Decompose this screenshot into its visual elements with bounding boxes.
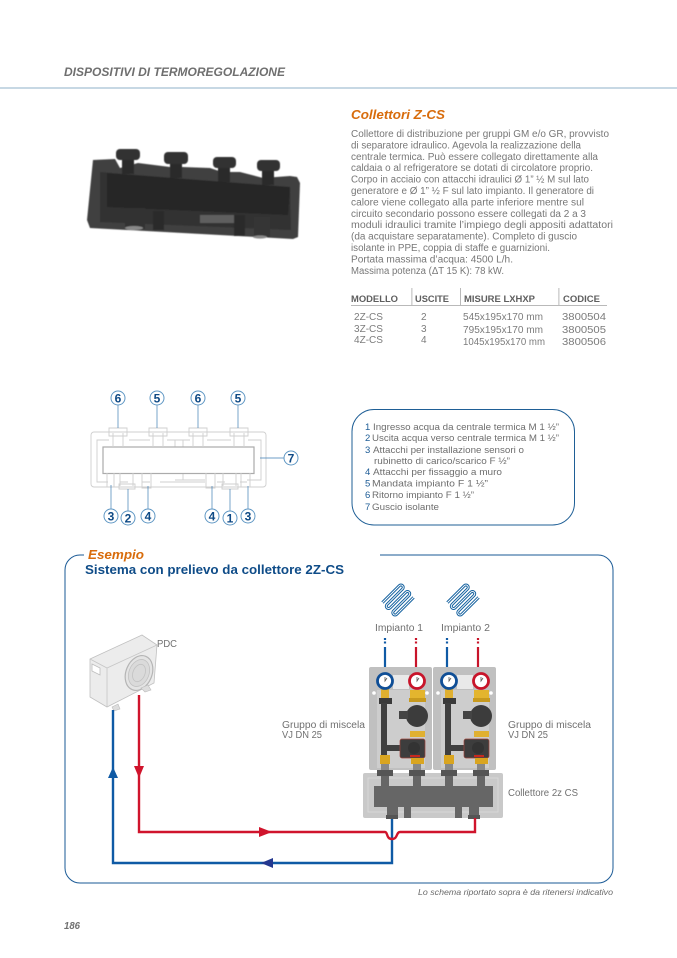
product table <box>351 288 607 348</box>
legend panel: Guscio isolante <box>372 502 439 513</box>
product description: moduli idraulici tramite l’impiego degli appositi adattatori <box>351 220 613 231</box>
heading: system: Sistema con prelievo da collettore 2Z-CS <box>85 562 344 577</box>
arrow: red right <box>259 827 272 837</box>
legend panel <box>352 410 574 525</box>
legend panel: 3 <box>365 445 370 456</box>
callout 6 <box>111 391 125 405</box>
legend panel: 5 <box>365 478 370 490</box>
product table: MISURE LXHXP <box>464 294 536 305</box>
label: mixing group left <box>282 720 365 741</box>
product table: MODELLO <box>351 294 398 305</box>
callout 4 <box>141 509 155 523</box>
product table: 4 <box>421 335 427 346</box>
page number: 186 <box>64 920 80 932</box>
footnote: Lo schema riportato sopra è da ritenersi indicativo <box>418 887 613 897</box>
icon: underfloor coil 1 <box>382 584 414 616</box>
product table: 3800506 <box>562 337 606 348</box>
callout 5 <box>231 391 245 405</box>
example panel frame <box>65 555 613 883</box>
callout 1 <box>223 511 237 525</box>
collector 2z CS <box>363 770 503 819</box>
mixing group 2 <box>433 667 496 770</box>
label: mixing group left: VJ DN 25 <box>282 730 322 741</box>
legend panel: Ritorno impianto F 1 ½” <box>372 490 474 501</box>
legend panel: 7 <box>365 502 370 513</box>
callout 4: 4 <box>209 509 216 523</box>
callout 1: 1 <box>227 511 234 525</box>
callout 5: 5 <box>154 391 161 405</box>
page section title: DISPOSITIVI DI TERMOREGOLAZIONE <box>64 67 285 79</box>
legend panel: Ingresso acqua da centrale termica M 1 ½” <box>373 422 559 433</box>
heading: Esempio: Esempio <box>88 547 144 562</box>
callout 4 <box>205 509 219 523</box>
label: mixing group right: Gruppo di miscela <box>508 720 591 731</box>
legend panel: 6 <box>365 490 370 501</box>
label: Impianto 1: Impianto 1 <box>375 623 423 634</box>
product description: Collettore di distribuzione per gruppi GM e/o GR, provvisto <box>351 129 609 140</box>
product description: generatore e Ø 1” ½ F sul lato impianto. Il generatore di <box>351 186 594 197</box>
callout 3 <box>241 509 255 523</box>
product description: centrale termica. Può essere collegato direttamente alla <box>351 152 598 163</box>
product description: Corpo in acciaio con attacchi idraulici Ø 1” ½ M sul lato <box>351 175 589 186</box>
product table: 3Z-CS <box>354 324 383 335</box>
legend panel: Uscita acqua verso centrale termica M 1 ½” <box>372 433 559 444</box>
product table: 3800504 <box>562 312 606 323</box>
plant supply and return stubs <box>385 638 478 667</box>
callout 5: 5 <box>235 391 242 405</box>
label: mixing group left: Gruppo di miscela <box>282 720 365 731</box>
product table: USCITE <box>415 294 449 305</box>
product table: 1045x195x170 mm <box>463 337 545 348</box>
label: PDC: PDC <box>157 639 177 650</box>
product description: di separatore idraulico. Agevola la realizzazione della <box>351 140 581 151</box>
product photo: collector <box>87 149 300 239</box>
blue return pipe <box>113 710 392 863</box>
legend panel: Attacchi per fissaggio a muro <box>373 467 502 478</box>
red supply pipe <box>139 695 475 839</box>
legend panel: Attacchi per installazione sensori o <box>373 445 524 456</box>
product table: 3800505 <box>562 325 606 336</box>
label: mixing group right: VJ DN 25 <box>508 730 548 741</box>
product table: 545x195x170 mm <box>463 312 543 323</box>
arrow: red down <box>134 766 144 778</box>
product description: calore viene collegato alla parte inferiore mentre sul <box>351 197 584 208</box>
product table: 2 <box>421 312 427 323</box>
product description: circuito secondario possono essere collegati da 2 a 3 <box>351 209 586 220</box>
callout 6: 6 <box>115 391 122 405</box>
arrow: blue up <box>108 767 118 778</box>
legend panel: 4 <box>365 467 370 478</box>
arrow: blue left <box>261 858 273 868</box>
callout 2 <box>121 511 135 525</box>
product description <box>351 129 613 277</box>
label: mixing group right <box>508 720 591 741</box>
icon: underfloor coil 2 <box>447 584 479 616</box>
product description: isolante in PPE, coppia di staffe e guarnizioni. <box>351 243 550 254</box>
callout 5 <box>150 391 164 405</box>
callout 4: 4 <box>145 509 152 523</box>
heat pump PDC <box>90 635 158 711</box>
callout 2: 2 <box>125 511 132 525</box>
legend panel: Mandata impianto F 1 ½” <box>372 478 488 490</box>
product table: 3 <box>421 324 427 335</box>
callout 6 <box>191 391 205 405</box>
product table: 2Z-CS <box>354 312 383 323</box>
callout 3 <box>104 509 118 523</box>
product table: 4Z-CS <box>354 335 383 346</box>
product table: CODICE <box>563 294 600 305</box>
product table: 795x195x170 mm <box>463 325 543 336</box>
mixing group 1 <box>369 667 432 770</box>
product description: Massima potenza (ΔT 15 K): 78 kW. <box>351 266 504 277</box>
callout 6: 6 <box>195 391 202 405</box>
callout 3: 3 <box>108 509 115 523</box>
legend panel: 1 <box>365 422 370 433</box>
callout 7 <box>284 451 298 465</box>
legend panel: 2 <box>365 433 370 444</box>
legend panel: rubinetto di carico/scarico F ½” <box>374 456 510 467</box>
product description: (da acquistare separatamente). Completo di guscio <box>351 232 577 243</box>
callout 3: 3 <box>245 509 252 523</box>
product description: Portata massima d’acqua: 4500 L/h. <box>351 254 513 265</box>
heading: Collettori Z-CS: Collettori Z-CS <box>351 107 445 122</box>
callout 7: 7 <box>288 451 295 465</box>
product description: caldaia o al refrigeratore se dotati di circolatore proprio. <box>351 163 593 174</box>
label: Impianto 2: Impianto 2 <box>441 623 490 634</box>
label: collector: Collettore 2z CS <box>508 788 578 799</box>
technical drawing of collector with callouts <box>91 391 298 525</box>
